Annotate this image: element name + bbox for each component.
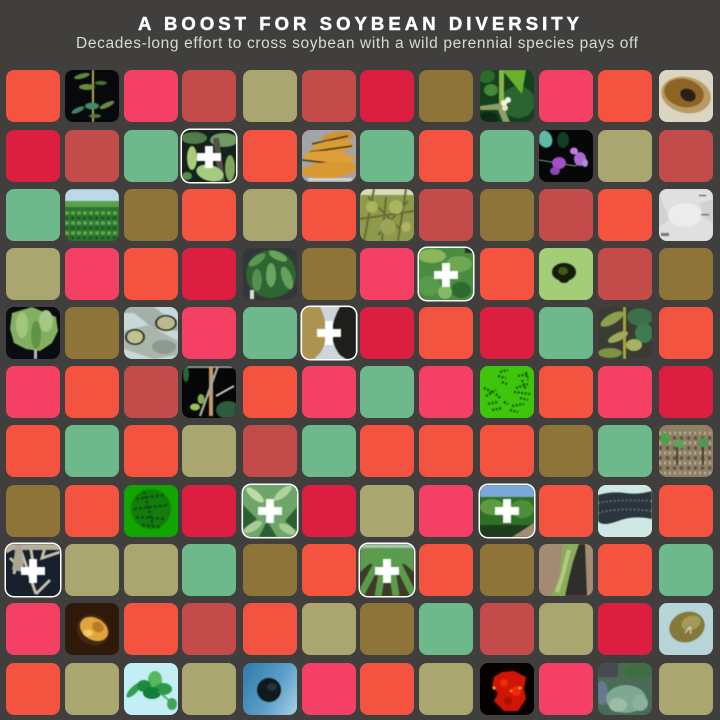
photo: seed stain on beige bbox=[658, 70, 712, 122]
photo: soybean row on dry soil bbox=[538, 544, 592, 596]
highlighted photo: converging crop rows with plus bbox=[360, 544, 414, 596]
icon: plus bbox=[258, 499, 282, 523]
tile grid row 2 bbox=[6, 128, 713, 184]
photo: purple flowers on black bbox=[538, 130, 592, 182]
photo: tangled olive plants bbox=[360, 189, 414, 241]
tile grid row 4 bbox=[6, 246, 713, 302]
photo: soybean plant on dark background bbox=[242, 248, 296, 300]
icon: plus bbox=[316, 321, 340, 345]
tile grid row 11 bbox=[6, 663, 713, 715]
highlighted photo: leaves on dark with plus bbox=[182, 130, 236, 182]
photo: golden seed on dark brown bbox=[64, 603, 118, 655]
icon: plus bbox=[21, 559, 45, 583]
tile grid row 6 bbox=[6, 366, 713, 418]
subtitle: Decades-long effort to cross soybean with a wild perennial species pays off bbox=[76, 35, 639, 52]
photo: plant stem on black bbox=[64, 70, 118, 122]
tile grid row 3 bbox=[6, 189, 713, 241]
highlighted photo: gold and black seeds with plus bbox=[302, 307, 356, 359]
tile grid row 1 bbox=[6, 70, 713, 122]
highlighted photo: leafy plant with plus bbox=[419, 248, 473, 300]
icon: plus bbox=[434, 263, 458, 287]
photo: soybean field under sky bbox=[64, 189, 118, 241]
photo: stems and small leaves on black bbox=[182, 366, 236, 418]
photo: dark specks on bright green bbox=[480, 366, 534, 418]
highlighted photo: green leaf canopy with plus bbox=[242, 485, 296, 537]
photo: black seed on blue gradient bbox=[242, 663, 296, 715]
tile grid row 7 bbox=[6, 425, 713, 477]
photo: red fluorescent blob on black bbox=[480, 663, 534, 715]
photo: green-yellow leaves on dark bbox=[598, 307, 652, 359]
tile grid row 8 bbox=[6, 484, 713, 538]
photo: green plant on pale cyan bbox=[124, 663, 178, 715]
photo: pale grey map bbox=[658, 189, 712, 241]
photo: seedlings in gravel bbox=[658, 425, 712, 477]
title: A BOOST FOR SOYBEAN DIVERSITY bbox=[138, 13, 580, 34]
icon: plus bbox=[375, 559, 399, 583]
tile grid row 9 bbox=[4, 542, 713, 598]
tile grid row 10 bbox=[6, 603, 713, 655]
photo: dark root band on pale background bbox=[598, 485, 652, 537]
icon: plus bbox=[494, 499, 518, 523]
highlighted photo: soybean crop under blue sky with plus bbox=[480, 485, 534, 537]
tile grid row 5 bbox=[6, 306, 713, 360]
photo: blue-grey leaves with dark gaps bbox=[598, 663, 652, 715]
highlighted photo: pale roots on navy with plus bbox=[6, 544, 60, 596]
photo: stacked orange pods on grey bbox=[302, 130, 356, 182]
header: title and subtitle bbox=[76, 13, 639, 52]
photo: open pods with pale seeds bbox=[124, 307, 178, 359]
icon: plus bbox=[197, 146, 221, 168]
photo: olive seed on pale blue bbox=[658, 603, 712, 655]
photo: black bean on light green bbox=[538, 248, 592, 300]
photo: white soybean flower on leaves bbox=[480, 70, 534, 122]
photo: dark plant silhouette on green bbox=[124, 485, 178, 537]
photo: drooping leaves on black bbox=[6, 307, 60, 359]
